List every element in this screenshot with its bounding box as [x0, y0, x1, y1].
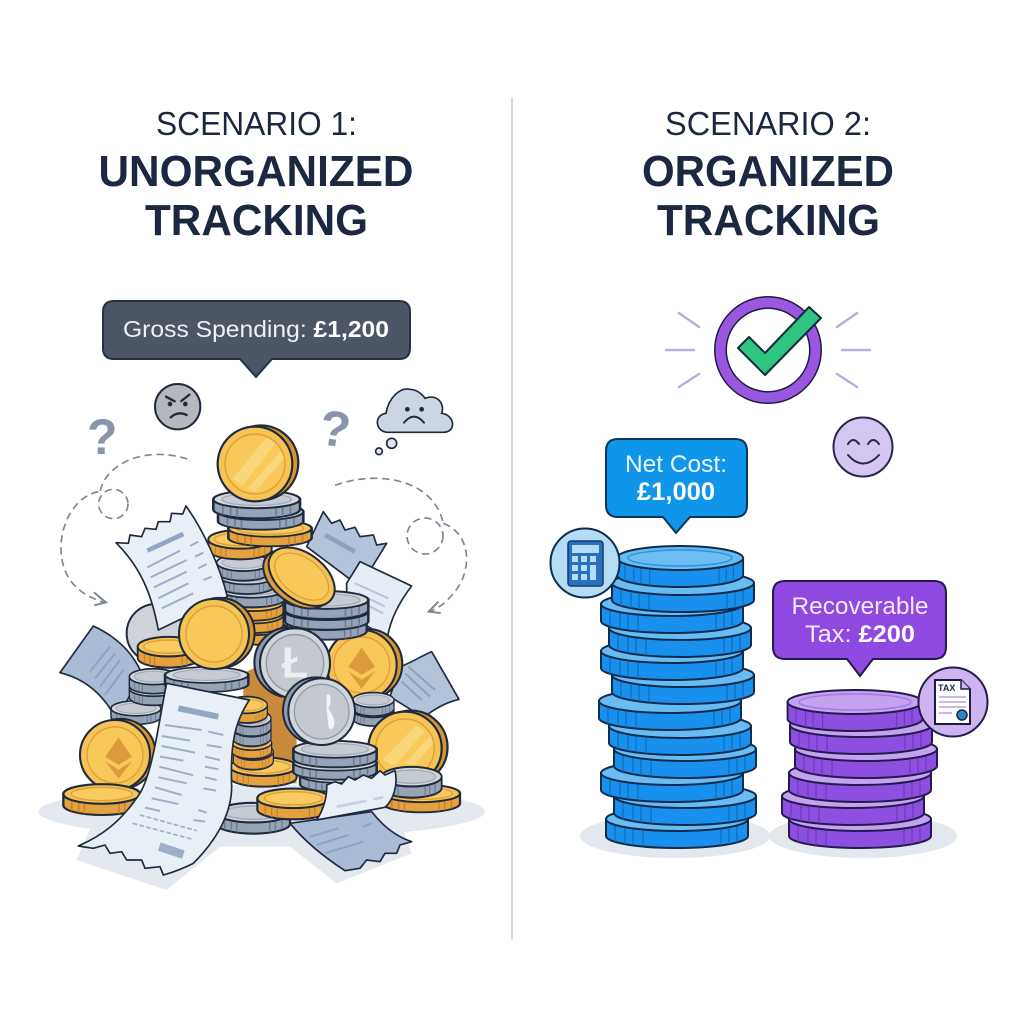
callout: gross spending: Gross Spending: £1,200 — [123, 316, 389, 342]
icon: sad thought cloud — [376, 389, 453, 455]
center divider — [511, 98, 513, 940]
question marks: ? — [87, 409, 118, 465]
green check — [738, 307, 821, 375]
shadows under coin stacks — [580, 814, 957, 858]
icon: smiling face — [834, 418, 892, 476]
coin: flat gold, bottom center — [257, 789, 329, 819]
heading: scenario 2: SCENARIO 2: — [665, 105, 871, 142]
coin column: upper pile — [208, 490, 312, 645]
coin: top gold coin — [218, 426, 298, 501]
coin: litecoin silver — [254, 627, 330, 698]
coin: tilted gold — [252, 534, 346, 622]
receipt: large left — [116, 506, 227, 630]
dashed arrows — [61, 454, 467, 613]
coin stack: silver and gold far right — [382, 767, 460, 812]
sparkle rays — [666, 313, 870, 387]
callout: net cost: Net Cost: — [625, 451, 727, 478]
coin: eth gold, left — [80, 719, 156, 790]
coin: silver disc, back left — [127, 604, 185, 663]
coin stack: silver right — [285, 591, 368, 640]
coin: gold, lower right — [368, 711, 448, 785]
icon: tax document badge: TAX — [938, 683, 955, 693]
coin: gold face, left middle — [179, 598, 255, 669]
heading: scenario 2: TRACKING — [657, 197, 880, 245]
coin stacks: left silver — [111, 667, 248, 724]
back receipts — [60, 512, 459, 871]
heading: scenario 1: UNORGANIZED — [98, 148, 414, 196]
coin: flat gold, bottom left — [63, 784, 140, 815]
icon: tax document badge — [918, 668, 988, 736]
heading: scenario 2: ORGANIZED — [642, 148, 894, 196]
callout: recoverable tax: Tax: £200 — [805, 621, 915, 648]
icon: angry face — [155, 384, 200, 429]
heading: scenario 1: TRACKING — [145, 197, 368, 245]
coin stacks: central lower — [217, 647, 297, 834]
receipt: small bottom right — [317, 771, 396, 820]
heading: scenario 1: SCENARIO 1: — [156, 105, 357, 142]
ground shadow — [38, 785, 485, 890]
heading: scenario 2 — [642, 105, 894, 245]
heading: scenario 1 — [98, 105, 414, 245]
coin: eth gold, right — [327, 629, 402, 700]
illustration: check mark badge — [666, 302, 870, 398]
coin stack: silver under silver coin — [293, 741, 380, 792]
blue coin stack: net cost — [599, 546, 756, 848]
question marks: ? — [316, 399, 354, 459]
callout: gross spending — [103, 301, 410, 377]
illustration: messy pile of coins and receipts — [38, 384, 485, 890]
purple coin stack: recoverable tax — [782, 690, 937, 848]
coin: litecoin silver: Ł — [282, 639, 308, 687]
callout: recoverable tax: Recoverable — [792, 593, 928, 620]
callout: net cost — [606, 439, 747, 533]
coin: silver face — [283, 677, 355, 745]
question marks — [87, 399, 354, 465]
coin: flat gold, left middle — [138, 637, 199, 668]
callout: net cost: £1,000 — [637, 478, 715, 506]
coin stack: silver low right — [353, 693, 394, 726]
callout: recoverable tax — [773, 581, 946, 676]
receipt lines on back receipts — [90, 535, 435, 853]
icon: calculator badge — [550, 528, 620, 598]
receipt: large front — [78, 683, 249, 875]
purple ring — [720, 302, 816, 398]
